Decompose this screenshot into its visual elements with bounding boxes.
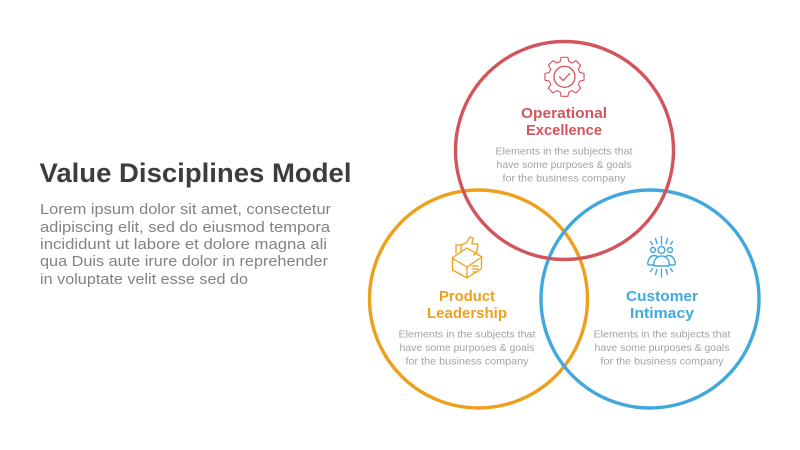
circle: product leadership <box>370 190 588 408</box>
panel: operational excellence <box>496 57 633 185</box>
heading: Customer <box>626 289 698 305</box>
body text: have some purposes & goals <box>400 342 534 354</box>
heading: Operational <box>521 106 607 122</box>
intro paragraph: adipiscing elit, sed do eiusmod tempora <box>40 219 331 236</box>
intro paragraph: incididunt ut labore et dolore magna ali <box>40 236 327 253</box>
title: Value Disciplines Model <box>40 158 352 188</box>
icon: people with rays <box>648 236 675 277</box>
icon: box with thumbs up <box>452 237 482 278</box>
heading: Intimacy <box>630 306 694 322</box>
body text: for the business company <box>600 356 724 368</box>
body text: have some purposes & goals <box>496 159 632 171</box>
icon: gear with check <box>545 57 584 96</box>
intro paragraph <box>40 201 331 288</box>
intro paragraph: in voluptate velit esse sed do <box>40 271 248 288</box>
body text: Elements in the subjects that <box>496 146 633 158</box>
body text: Elements in the subjects that <box>398 328 536 340</box>
circle: customer intimacy <box>541 190 759 408</box>
circle: operational excellence <box>456 42 674 260</box>
intro paragraph: qua Duis aute irure dolor in reprehender <box>40 253 328 270</box>
heading: Product <box>439 289 495 305</box>
body text: for the business company <box>502 172 626 184</box>
body text: Elements in the subjects that <box>594 328 731 340</box>
body text: for the business company <box>406 356 529 368</box>
panel: customer intimacy <box>594 236 731 368</box>
panel: product leadership <box>398 237 536 368</box>
heading: Leadership <box>427 306 507 322</box>
body text: have some purposes & goals <box>594 342 730 354</box>
intro paragraph: Lorem ipsum dolor sit amet, consectetur <box>40 201 331 218</box>
heading: Excellence <box>526 123 602 139</box>
